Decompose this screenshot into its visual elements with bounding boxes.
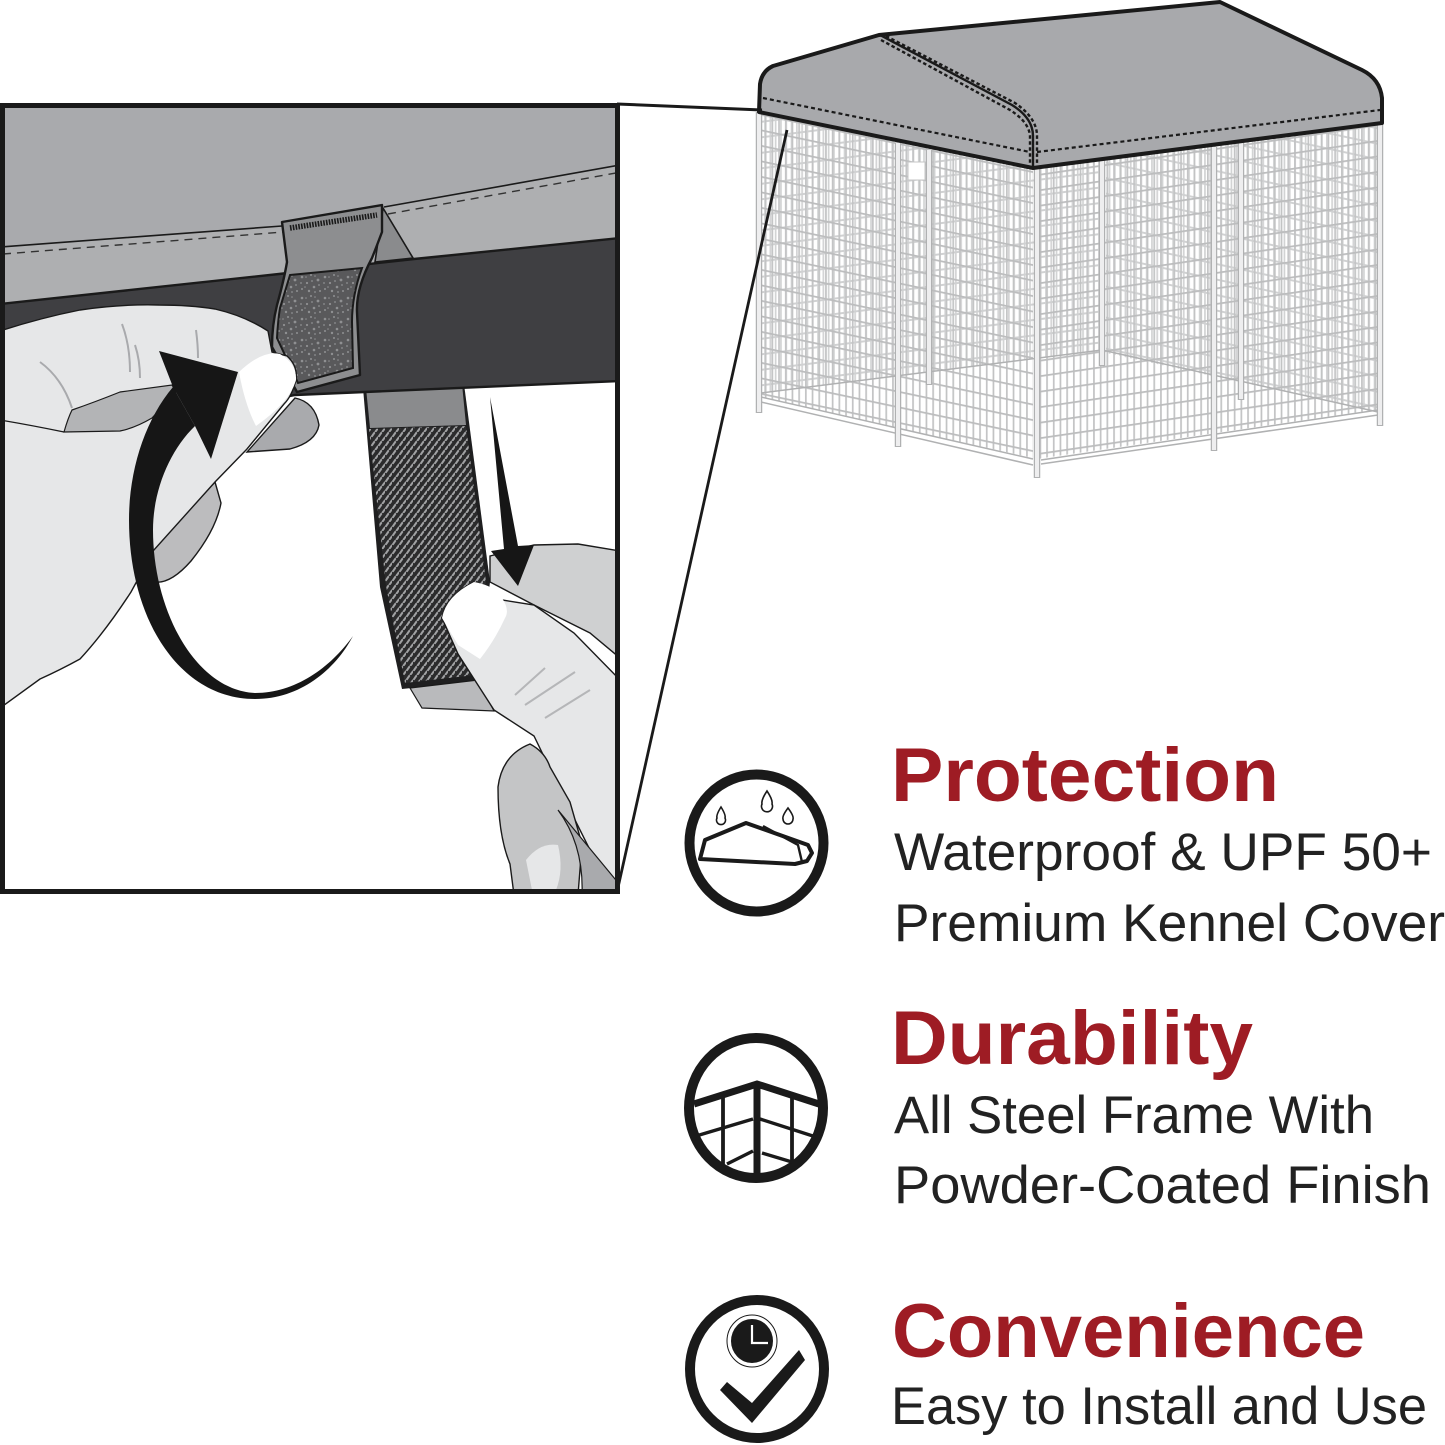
strap fold	[375, 208, 413, 262]
left hand back fingers	[150, 398, 319, 582]
text block: Durability: Powder-Coated Finish	[894, 1156, 1431, 1215]
text block: Convenience	[891, 1289, 1427, 1436]
kennel door latch plate	[908, 162, 925, 180]
kennel illustration	[759, 2, 1382, 478]
arrow: straight down	[490, 397, 534, 586]
roof fabric	[5, 108, 615, 246]
text block: Durability: All Steel Frame With	[894, 1086, 1374, 1145]
icon: rain-protected cover	[690, 774, 824, 912]
text block: Durability: Durability	[891, 996, 1253, 1081]
kennel rails	[761, 350, 1378, 465]
right hand upper finger	[490, 544, 620, 658]
lower strap	[363, 384, 494, 711]
kennel front walls	[759, 112, 1380, 459]
text block: Protection	[891, 733, 1445, 953]
right hand lower finger	[498, 744, 620, 895]
left hand	[0, 305, 296, 708]
kennel back walls	[761, 60, 1378, 412]
zoom connector lines	[617, 104, 787, 892]
dark kennel frame band	[0, 238, 620, 400]
kennel posts	[759, 112, 1380, 478]
icon: steel frame	[689, 1038, 823, 1178]
text block: Protection: Waterproof & UPF 50+	[894, 823, 1432, 882]
text block: Convenience: Convenience	[892, 1289, 1365, 1374]
detail panel: velcro strap close-up	[0, 100, 625, 895]
text block: Convenience: Easy to Install and Use	[891, 1377, 1427, 1436]
right hand thumb	[442, 582, 620, 890]
text block: Durability	[891, 996, 1431, 1215]
arrow: curved up	[129, 351, 353, 699]
fabric hem band	[5, 165, 615, 255]
icon: clock and check mark	[690, 1300, 824, 1438]
text block: Protection: Protection	[891, 733, 1279, 818]
upper strap	[272, 205, 382, 392]
text block: Protection: Premium Kennel Cover	[894, 894, 1445, 953]
kennel roof cover	[759, 2, 1382, 168]
